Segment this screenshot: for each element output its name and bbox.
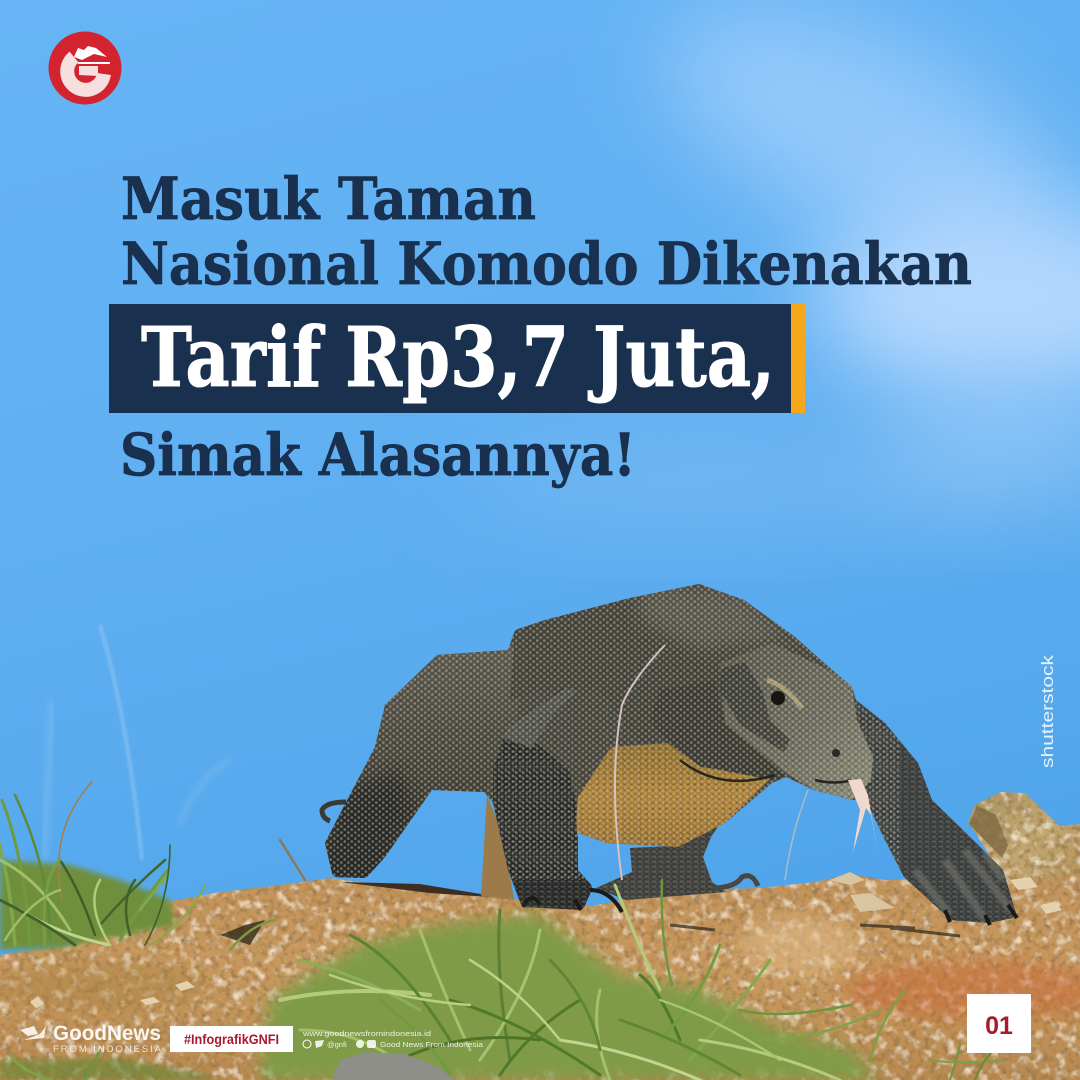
website and social handles: www.goodnewsfromindonesia.id: [302, 1029, 431, 1038]
GoodNews logo: GoodNews: [53, 1022, 161, 1045]
highlighted headline: Tarif Rp3,7 Juta,: [141, 310, 775, 406]
right front arm: [852, 695, 1020, 925]
hashtag label: #InfografikGNFI: [184, 1032, 279, 1047]
nostril: [832, 749, 840, 757]
neck: [653, 697, 786, 780]
eye: [771, 691, 785, 705]
far rock on the right: [968, 792, 1080, 900]
ground: dirt hill: [0, 874, 1080, 1080]
website and social handles: Good News From Indonesia: [380, 1040, 484, 1049]
grass: centre foreground meadow: [260, 880, 905, 1080]
near front leg: [493, 688, 593, 910]
page number: 01: [985, 1012, 1013, 1040]
komodo tail tip: [322, 802, 346, 821]
grass: left tuft: [0, 782, 305, 950]
soil details: red earth, dark cracks and pebbles: [0, 872, 1080, 1020]
head: [720, 643, 873, 800]
title line 1: Masuk Taman: [121, 165, 536, 233]
title line 4: Simak Alasannya!: [120, 421, 636, 489]
komodo dragon: [320, 580, 1020, 925]
hind haunch: [320, 645, 530, 880]
logo: red circle emblem: [48, 32, 122, 104]
footer branding: [20, 1022, 484, 1055]
grass: bottom left and right tufts: [0, 1045, 1005, 1080]
website and social handles: [302, 1029, 484, 1049]
body silhouette: [325, 584, 1017, 923]
website and social handles: @gnfi: [327, 1040, 347, 1049]
GoodNews logo: FROM INDONESIA: [53, 1044, 162, 1055]
page number: [967, 994, 1031, 1053]
komodo face and tongue details: [523, 691, 1017, 925]
far hind leg: [481, 795, 514, 900]
tongue: [848, 779, 879, 860]
photo credit: shutterstock: [1038, 654, 1057, 768]
far front leg and claws: [596, 810, 758, 900]
golden belly: [575, 743, 772, 850]
claws: [523, 890, 1017, 925]
title line 2: Nasional Komodo Dikenakan: [121, 230, 972, 298]
torso back: [510, 584, 795, 700]
grey stone at bottom edge: [332, 1052, 455, 1080]
hashtag label: [170, 1026, 293, 1052]
grass stalk in front of komodo: [615, 645, 808, 880]
mouth line: [680, 760, 852, 782]
scale texture: [320, 580, 900, 880]
title: [120, 165, 972, 489]
GoodNews logo: [20, 1022, 162, 1055]
highlight bar: tarif: [109, 304, 805, 413]
